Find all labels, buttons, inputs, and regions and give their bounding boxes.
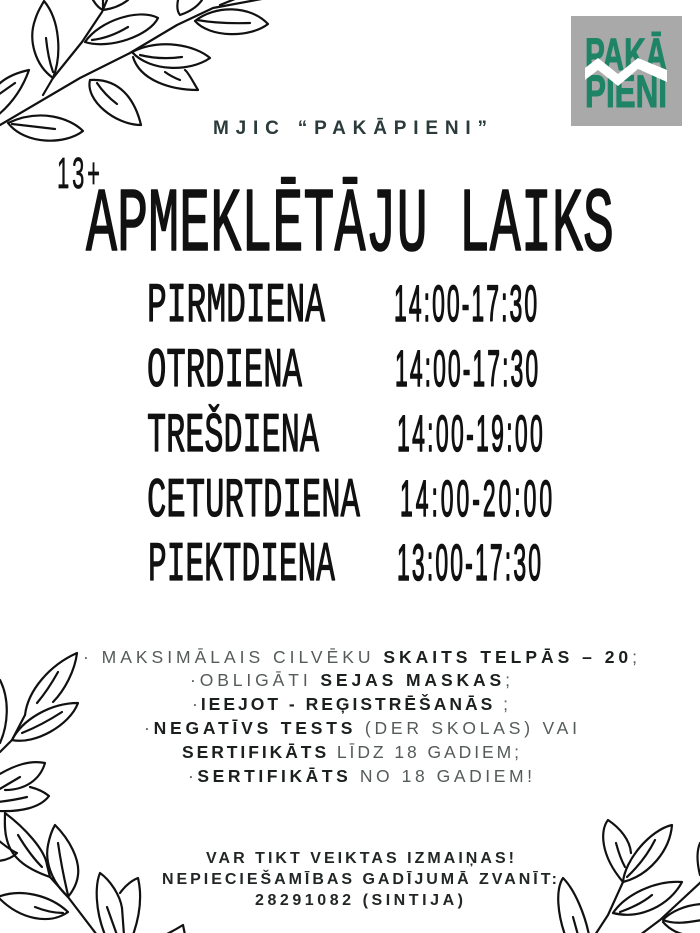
age label: 13+ — [57, 150, 100, 198]
row: Wednesday: TREŠDIENA — [147, 404, 319, 468]
row: Thursday: 14:00-20:00 — [400, 471, 552, 528]
row: Thursday: CETURTDIENA — [147, 469, 360, 533]
decoration: bottom-left leafy branch — [0, 653, 185, 933]
rules text block: ·SERTIFIKĀTS NO 18 GADIEM! — [188, 766, 532, 786]
row: Tuesday: 14:00-17:30 — [395, 341, 538, 398]
footer contact note: 28291082 (SINTIJA) — [255, 892, 463, 909]
rules text block: SERTIFIKĀTS LĪDZ 18 GADIEM; — [182, 742, 519, 762]
row: Wednesday: 14:00-19:00 — [397, 406, 543, 463]
row: Friday: PIEKTDIENA — [148, 533, 335, 597]
rules text block: · MAKSIMĀLAIS CILVĒKU SKAITS TELPĀS – 20; — [83, 647, 637, 667]
row: Tuesday: OTRDIENA — [147, 339, 302, 403]
row: Monday: PIRMDIENA — [147, 274, 325, 338]
footer contact note — [162, 850, 557, 909]
rules text block: ·NEGATĪVS TESTS (DER SKOLAS) VAI — [144, 718, 577, 738]
decoration: top-left leafy branch — [0, 0, 268, 141]
rules text block: ·OBLIGĀTI SEJAS MASKAS; — [190, 670, 510, 690]
rules text block — [83, 647, 637, 786]
logo: Pakāpieni: PIENI — [585, 66, 667, 117]
footer contact note: VAR TIKT VEIKTAS IZMAIŅAS! — [206, 850, 514, 867]
decoration: bottom-right leafy branch — [558, 820, 700, 933]
logo: Pakāpieni — [571, 16, 682, 126]
organisation name: MJIC “PAKĀPIENI” — [213, 118, 487, 139]
row: Monday: 14:00-17:30 — [394, 276, 537, 333]
schedule — [147, 274, 552, 597]
footer contact note: NEPIECIEŠAMĪBAS GADĪJUMĀ ZVANĪT: — [162, 869, 557, 888]
row: Friday: 13:00-17:30 — [397, 535, 541, 592]
row: Tuesday — [147, 339, 538, 403]
rules text block: ·IEEJOT - REĢISTRĒŠANĀS ; — [192, 693, 508, 714]
